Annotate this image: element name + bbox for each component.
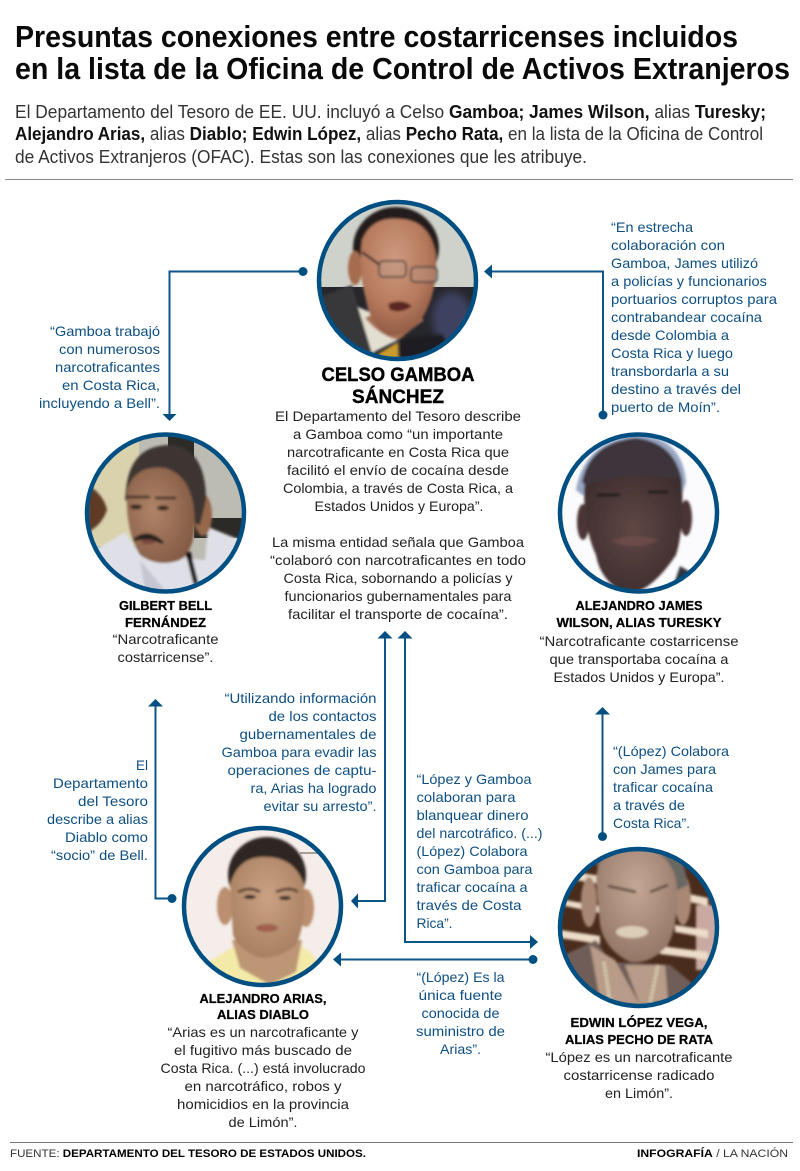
quote: James used corrupt police: puerto de Moín”.: [611, 399, 720, 415]
quote: Lopez and Gamboa launder money: del narcotráfico. (...): [416, 825, 542, 841]
arrow: Gamboa and Lopez two-way: [398, 631, 538, 949]
label: Edwin Lopez: EDWIN LÓPEZ VEGA,: [570, 1015, 708, 1030]
quote: Lopez and Gamboa launder money: Rica”.: [416, 915, 452, 931]
text: Gamboa description: facilitar el transporte de cocaína”.: [288, 606, 508, 622]
quote: Lopez and Gamboa launder money: con Gamboa para: [416, 861, 533, 877]
quote: alias Diablo partner of Bell: describe a alias: [47, 811, 148, 827]
text: Gamboa description: a Gamboa como “un importante: [293, 426, 503, 442]
text: Gamboa description: Estados Unidos y Europa”.: [314, 498, 484, 514]
quote: Arias evades operations: “Utilizando información: [224, 690, 376, 706]
text: Gamboa description: funcionarios gubernamentales para: [284, 588, 512, 604]
quote: Lopez collaborates with James: “(López) Colabora: [613, 743, 729, 759]
quote: Lopez and Gamboa launder money: traficar cocaína a: [416, 879, 528, 895]
quote: Arias evades operations: gubernamentales de: [240, 726, 377, 742]
quote: Gamboa worked with traffickers: narcotraficantes: [55, 359, 160, 375]
text: Gamboa description: facilitó el envío de cocaína desde: [287, 462, 509, 478]
quote: Lopez only known source: suministro de: [416, 1023, 505, 1039]
quote: Arias evades operations: de los contactos: [268, 708, 376, 724]
quote: Arias evades operations: Gamboa para evadir las: [222, 744, 376, 760]
credit: INFOGRAFÍA / LA NACIÓN: [637, 1147, 788, 1160]
quote: Lopez and Gamboa launder money: blanquear dinero: [416, 807, 529, 823]
arrow: Arias to Bell: [148, 699, 176, 903]
quote: James used corrupt police: portuarios corruptos para: [611, 291, 777, 307]
quote: Lopez collaborates with James: [613, 743, 729, 831]
quote: Lopez collaborates with James: Costa Rica”.: [613, 815, 690, 831]
quote: James used corrupt police: Costa Rica y luego: [611, 345, 733, 361]
arrow: Wilson to Gamboa: [484, 264, 608, 420]
quote: Gamboa worked with traffickers: incluyendo a Bell”.: [39, 395, 160, 411]
intro text: de Activos Extranjeros (OFAC). Estas son las conexiones que les atribuye.: [15, 146, 587, 167]
quote: Gamboa worked with traffickers: “Gamboa trabajó: [50, 323, 160, 339]
portrait: Celso Gamboa: [315, 198, 480, 367]
text: Gamboa description: Colombia, a través de Costa Rica, a: [283, 480, 513, 496]
title: Presuntas conexiones entre costarricenses incluidos: [15, 19, 738, 54]
label: Edwin Lopez: en Limón”.: [605, 1085, 673, 1101]
quote: James used corrupt police: a policías y funcionarios: [611, 273, 767, 289]
quote: Lopez and Gamboa launder money: [416, 771, 542, 931]
text: Gamboa description: “colaboró con narcotraficantes en todo: [270, 552, 526, 568]
quote: Lopez and Gamboa launder money: (López) Colabora: [416, 843, 528, 859]
label: Alejandro Arias: “Arias es un narcotraficante y: [168, 1024, 358, 1040]
quote: Lopez and Gamboa launder money: colaboran para: [416, 789, 516, 805]
intro text: El Departamento del Tesoro de EE. UU. incluyó a Celso Gamboa; James Wilson, alias Turesky;: [15, 101, 766, 122]
label: Gilbert Bell: [112, 599, 219, 665]
arrow: Lopez to Wilson: [595, 707, 610, 841]
quote: Lopez and Gamboa launder money: “López y Gamboa: [416, 771, 532, 787]
label: Alejandro Arias: Costa Rica. (...) está involucrado: [160, 1060, 366, 1076]
quote: James used corrupt police: colaboración con: [611, 237, 725, 253]
quote: Gamboa worked with traffickers: en Costa Rica,: [62, 377, 160, 393]
intro text: [15, 101, 766, 167]
quote: Lopez only known source: “(López) Es la: [416, 969, 505, 985]
quote: Lopez only known source: única fuente: [418, 987, 503, 1003]
quote: alias Diablo partner of Bell: [47, 757, 148, 863]
label: James Wilson: WILSON, ALIAS TURESKY: [556, 616, 722, 630]
label: James Wilson: ALEJANDRO JAMES: [576, 599, 702, 613]
quote: alias Diablo partner of Bell: “socio” de Bell.: [51, 847, 148, 863]
quote: James used corrupt police: “En estrecha: [611, 219, 693, 235]
quote: alias Diablo partner of Bell: del Tesoro: [78, 793, 148, 809]
quote: James used corrupt police: Gamboa, James utilizó: [611, 255, 758, 271]
label: Gilbert Bell: costarricense”.: [118, 649, 214, 665]
label: Gilbert Bell: GILBERT BELL: [119, 599, 212, 613]
quote: Lopez only known source: Arias”.: [440, 1041, 481, 1057]
text: Gamboa description: Costa Rica, sobornando a policías y: [284, 570, 512, 586]
label: Edwin Lopez: [546, 1015, 733, 1101]
title: [15, 19, 790, 86]
label: Edwin Lopez: “López es un narcotraficante: [546, 1049, 733, 1065]
portrait: Alejandro Arias: [180, 824, 345, 990]
heading: Celso Gamboa Sanchez: SÁNCHEZ: [352, 386, 444, 408]
quote: Arias evades operations: evitar su arresto”.: [264, 798, 376, 814]
source footer: FUENTE: DEPARTAMENTO DEL TESORO DE ESTADOS UNIDOS.: [10, 1148, 366, 1160]
quote: Arias evades operations: [222, 690, 377, 814]
quote: Lopez only known source: [416, 969, 505, 1057]
label: Gilbert Bell: FERNÁNDEZ: [125, 615, 206, 630]
quote: alias Diablo partner of Bell: Diablo como: [65, 829, 148, 845]
quote: Lopez only known source: conocida de: [422, 1005, 500, 1021]
quote: Gamboa worked with traffickers: [39, 323, 160, 411]
label: James Wilson: Estados Unidos y Europa”.: [554, 669, 724, 685]
heading: Celso Gamboa Sanchez: [322, 365, 475, 408]
text: Gamboa description: narcotraficante en Costa Rica que: [287, 444, 509, 460]
quote: James used corrupt police: contrabandear cocaína: [611, 309, 762, 325]
intro text: Alejandro Arias, alias Diablo; Edwin López, alias Pecho Rata, en la lista de la Oficina de Control: [15, 123, 763, 144]
label: James Wilson: [540, 599, 739, 685]
portrait: Gilbert Bell: [84, 431, 249, 600]
label: James Wilson: “Narcotraficante costarricense: [540, 633, 739, 649]
label: Alejandro Arias: en narcotráfico, robos y: [184, 1078, 342, 1094]
quote: James used corrupt police: destino a través del: [611, 381, 741, 397]
text: Gamboa description: La misma entidad señala que Gamboa: [272, 534, 524, 550]
quote: Lopez collaborates with James: con James para: [613, 761, 716, 777]
quote: alias Diablo partner of Bell: Departamento: [53, 775, 148, 791]
label: Alejandro Arias: ALEJANDRO ARIAS,: [200, 992, 326, 1006]
quote: Lopez and Gamboa launder money: través de Costa: [416, 897, 522, 913]
quote: James used corrupt police: transbordarla a su: [611, 363, 729, 379]
quote: James used corrupt police: [611, 219, 777, 415]
arrow: Gamboa to Bell: [162, 267, 308, 421]
label: Edwin Lopez: costarricense radicado: [564, 1067, 715, 1083]
quote: Lopez collaborates with James: a través de: [613, 797, 685, 813]
quote: Gamboa worked with traffickers: con numerosos: [59, 341, 160, 357]
label: Alejandro Arias: ALIAS DIABLO: [217, 1008, 309, 1022]
label: Alejandro Arias: el fugitivo más buscado de: [174, 1042, 352, 1058]
heading: Celso Gamboa Sanchez: CELSO GAMBOA: [322, 365, 475, 386]
arrow: Gamboa and Arias two-way: [351, 631, 392, 908]
label: Alejandro Arias: [160, 992, 366, 1130]
arrow: Lopez to Arias: [333, 952, 538, 966]
quote: James used corrupt police: desde Colombia a: [611, 327, 729, 343]
quote: Arias evades operations: ra, Arias ha logrado: [250, 780, 377, 796]
portrait: Edwin Lopez: [557, 845, 722, 1010]
portrait: James Wilson: [557, 431, 722, 596]
label: Gilbert Bell: “Narcotraficante: [112, 631, 219, 647]
label: Alejandro Arias: de Limón”.: [228, 1114, 298, 1130]
label: Alejandro Arias: homicidios en la provincia: [177, 1096, 349, 1112]
text: Gamboa description: [270, 408, 526, 622]
quote: alias Diablo partner of Bell: El: [136, 757, 148, 773]
quote: Lopez collaborates with James: traficar cocaína: [613, 779, 713, 795]
label: Edwin Lopez: ALIAS PECHO DE RATA: [565, 1033, 713, 1047]
text: Gamboa description: El Departamento del Tesoro describe: [275, 408, 521, 424]
quote: Arias evades operations: operaciones de captu-: [228, 762, 377, 778]
label: James Wilson: que transportaba cocaína a: [550, 651, 729, 667]
